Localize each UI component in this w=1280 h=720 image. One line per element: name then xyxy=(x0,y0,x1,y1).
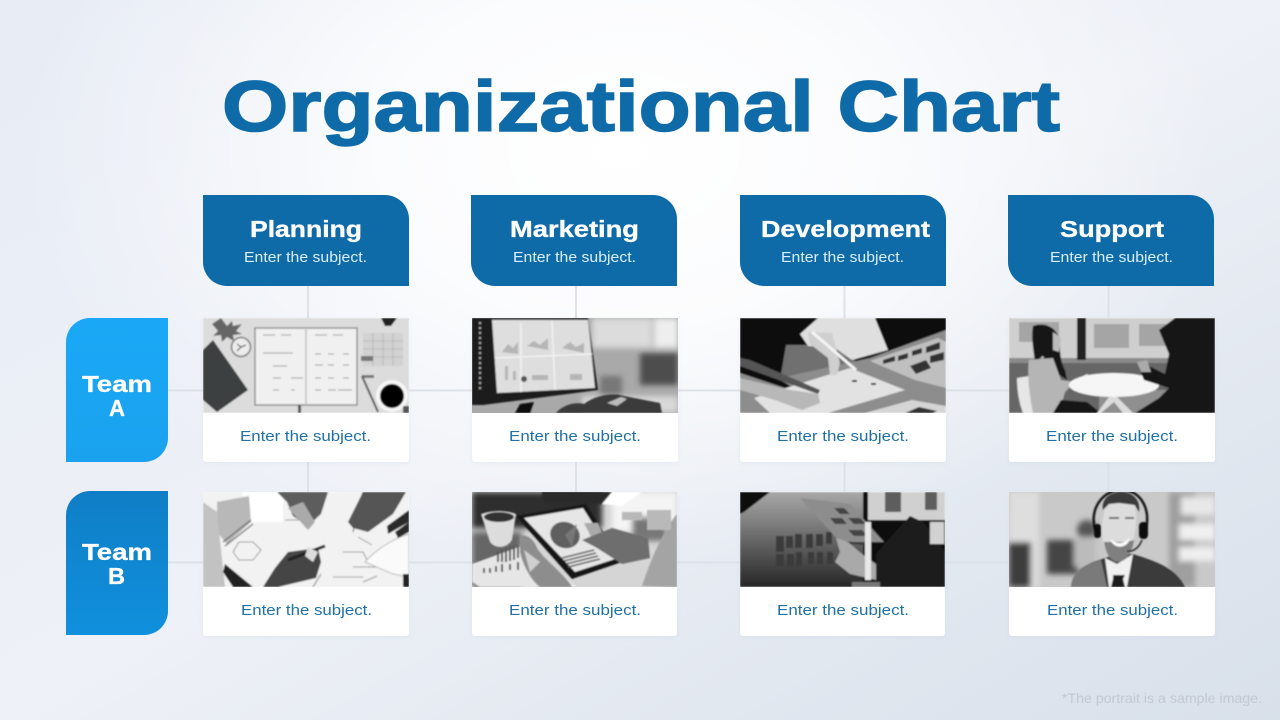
title: Organizational Chart xyxy=(222,68,1060,147)
card: Team A Development xyxy=(740,318,946,462)
caption: Enter the subject. xyxy=(509,602,641,619)
column header: Development xyxy=(740,195,946,286)
column header: Marketing: Marketing xyxy=(510,216,639,242)
photo: support agent with headset xyxy=(1009,492,1215,587)
column header: Development: Enter the subject. xyxy=(781,250,904,266)
caption: Enter the subject. xyxy=(777,602,909,619)
column header: Support: Enter the subject. xyxy=(1050,250,1173,266)
card: Team A Marketing xyxy=(472,318,678,462)
column header: Planning: Planning xyxy=(250,216,362,242)
row label: Team B: Team xyxy=(82,539,152,565)
caption: Enter the subject. xyxy=(240,428,371,445)
column header: Planning xyxy=(203,195,409,286)
card: Team B Planning xyxy=(203,492,409,636)
caption: Enter the subject. xyxy=(509,428,641,445)
connector lines xyxy=(168,286,1215,562)
photo: tablet and wall swatches xyxy=(740,492,945,587)
photo: meeting at round table xyxy=(1009,318,1215,413)
card: Team A Support xyxy=(1009,318,1215,462)
photo: hands over design sheets xyxy=(740,318,946,413)
row label: Team A: A xyxy=(109,395,125,421)
column header: Support: Support xyxy=(1060,216,1164,242)
card: Team A Planning xyxy=(203,318,409,462)
column header: Support xyxy=(1008,195,1214,286)
row label: Team B: B xyxy=(108,563,125,589)
card: Team B Development xyxy=(740,492,945,636)
caption: Enter the subject. xyxy=(1046,428,1178,445)
photo: analytics monitor xyxy=(472,318,678,413)
row label: Team A xyxy=(66,318,168,462)
column header: Marketing xyxy=(471,195,677,286)
caption: Enter the subject. xyxy=(777,428,909,445)
caption: Enter the subject. xyxy=(241,602,372,619)
card: Team B Marketing xyxy=(472,492,677,636)
photo: blueprints and hands xyxy=(203,492,409,587)
column header: Development: Development xyxy=(761,216,930,242)
column header: Marketing: Enter the subject. xyxy=(513,250,636,266)
row label: Team A: Team xyxy=(82,371,152,397)
photo: planner on desk xyxy=(203,318,409,413)
footnote: *The portrait is a sample image. xyxy=(1062,690,1262,706)
caption: Enter the subject. xyxy=(1047,602,1178,619)
card: Team B Support xyxy=(1009,490,1215,636)
column header: Planning: Enter the subject. xyxy=(244,250,367,266)
row label: Team B xyxy=(66,491,168,635)
photo: tablet with pie chart xyxy=(472,492,677,587)
